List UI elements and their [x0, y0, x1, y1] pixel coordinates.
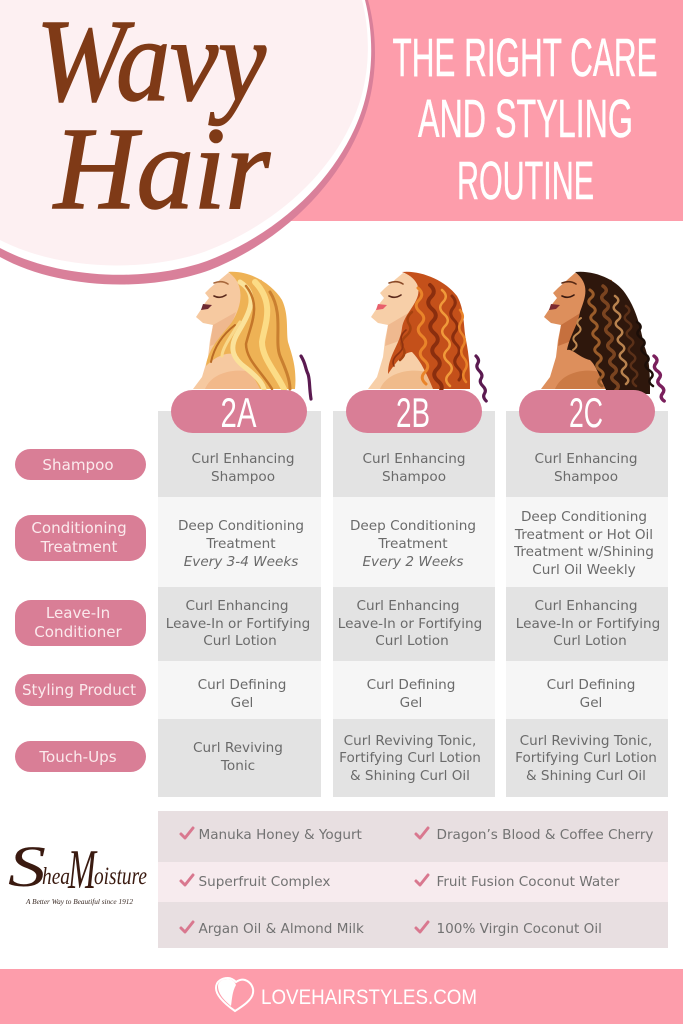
styling row text: Gel: [231, 695, 253, 711]
heading: the right care: [392, 28, 658, 211]
column pill 2B: 2B: [396, 389, 430, 436]
shampoo row text: Curl Enhancing: [362, 451, 466, 467]
column pill 2A: [171, 389, 307, 436]
logo: SheaMoisture: hea: [42, 864, 70, 890]
conditioning row text: Treatment or Hot Oil: [514, 527, 653, 543]
leave-in row text: Leave-In or Fortifying: [516, 616, 660, 632]
styling row text: [198, 677, 635, 711]
label: conditioning treatment: Treatment: [40, 538, 117, 556]
leave-in row text: Curl Enhancing: [356, 598, 460, 614]
logo: SheaMoisture: M: [67, 839, 98, 901]
touch-ups row text: Curl Reviving Tonic,: [520, 733, 652, 749]
conditioning row text: Deep Conditioning: [350, 518, 476, 534]
label: leave-in conditioner: Conditioner: [34, 623, 123, 641]
wavy strand 2A: [301, 356, 311, 399]
footer text: LOVEHAIRSTYLES.COM: [261, 986, 477, 1009]
label: shampoo: Shampoo: [42, 456, 114, 474]
illustration: woman with 2A hair: [193, 272, 295, 389]
ingredients right column: Fruit Fusion Coconut Water: [436, 874, 620, 890]
label: touch-ups: [15, 741, 146, 772]
conditioning row text: [178, 509, 654, 578]
conditioning row text: Curl Oil Weekly: [532, 562, 636, 578]
touch-ups row text: Fortifying Curl Lotion: [339, 750, 481, 766]
logo: SheaMoisture: S: [8, 834, 46, 899]
conditioning row text: Deep Conditioning: [178, 518, 304, 534]
logo: SheaMoisture: oisture: [94, 863, 147, 890]
ingredients left column: [181, 827, 364, 937]
shampoo row text: Curl Enhancing: [534, 451, 638, 467]
conditioning row text: Every 2 Weeks: [362, 554, 464, 570]
leave-in row text: Curl Lotion: [375, 633, 449, 649]
title circle: [0, 0, 375, 285]
ingredients left column: Superfruit Complex: [198, 874, 330, 890]
label: styling product: [15, 674, 146, 706]
leave-in row text: Leave-In or Fortifying: [338, 616, 482, 632]
shampoo row text: [191, 451, 638, 485]
label: leave-in conditioner: Leave-In: [46, 604, 110, 622]
touch-ups row text: Tonic: [220, 758, 255, 774]
illustration: woman with 2B hair: [368, 272, 470, 393]
styling row text: Curl Defining: [198, 677, 286, 693]
leave-in row text: Leave-In or Fortifying: [166, 616, 310, 632]
conditioning row text: Treatment: [377, 536, 448, 552]
ingredients panel: [158, 811, 668, 948]
ingredients right column: 100% Virgin Coconut Oil: [436, 921, 602, 937]
touch-ups row text: & Shining Curl Oil: [526, 768, 646, 784]
styling row text: Curl Defining: [547, 677, 635, 693]
footer bar: [0, 969, 683, 1024]
conditioning row text: Treatment w/Shining: [513, 544, 654, 560]
touch-ups row text: Curl Reviving Tonic,: [344, 733, 476, 749]
header panel: [290, 0, 683, 221]
logo: SheaMoisture: [8, 834, 147, 906]
styling row text: Gel: [400, 695, 422, 711]
conditioning row text: Every 3-4 Weeks: [184, 554, 298, 570]
logo: SheaMoisture: A Better Way to Beautiful since 1912: [25, 897, 133, 906]
label: conditioning treatment: Conditioning: [31, 519, 127, 537]
conditioning row text: Treatment: [205, 536, 276, 552]
wavy strand 2C: [654, 356, 664, 401]
ingredients left column: Argan Oil & Almond Milk: [198, 921, 364, 937]
leave-in row text: Curl Enhancing: [185, 598, 289, 614]
icon: heart logo: [216, 978, 253, 1011]
touch-ups row text: & Shining Curl Oil: [350, 768, 470, 784]
column pill 2A: 2A: [220, 389, 256, 436]
shampoo row text: Shampoo: [554, 469, 618, 485]
leave-in row text: [166, 598, 660, 649]
ingredients left column: Manuka Honey & Yogurt: [198, 827, 362, 843]
shampoo row text: Shampoo: [211, 469, 275, 485]
touch-ups row text: [193, 733, 657, 784]
label: shampoo: [15, 449, 146, 480]
label: styling product: Styling Product: [22, 681, 136, 699]
label: leave-in conditioner: [15, 600, 146, 646]
wavy strand 2B: [476, 356, 486, 401]
illustration: woman with 2C hair: [541, 272, 653, 394]
column pill 2C: [519, 389, 655, 436]
column pill 2C: 2C: [569, 389, 603, 436]
title: wavy hair: [36, 0, 271, 234]
ingredients right column: [416, 827, 653, 937]
touch-ups row text: Curl Reviving: [193, 740, 283, 756]
leave-in row text: Curl Lotion: [553, 633, 627, 649]
column pill 2B: [346, 389, 482, 436]
leave-in row text: Curl Lotion: [203, 633, 277, 649]
label: touch-ups: Touch-Ups: [38, 748, 117, 766]
touch-ups row text: Fortifying Curl Lotion: [515, 750, 657, 766]
styling row text: Gel: [580, 695, 602, 711]
shampoo row text: Shampoo: [382, 469, 446, 485]
shampoo row text: Curl Enhancing: [191, 451, 295, 467]
title: wavy hair: Hair: [52, 103, 271, 234]
label: conditioning treatment: [15, 515, 146, 561]
styling row text: Curl Defining: [367, 677, 455, 693]
leave-in row text: Curl Enhancing: [534, 598, 638, 614]
table rows: [158, 411, 668, 797]
ingredients right column: Dragon’s Blood & Coffee Cherry: [436, 827, 653, 843]
conditioning row text: Deep Conditioning: [521, 509, 647, 525]
